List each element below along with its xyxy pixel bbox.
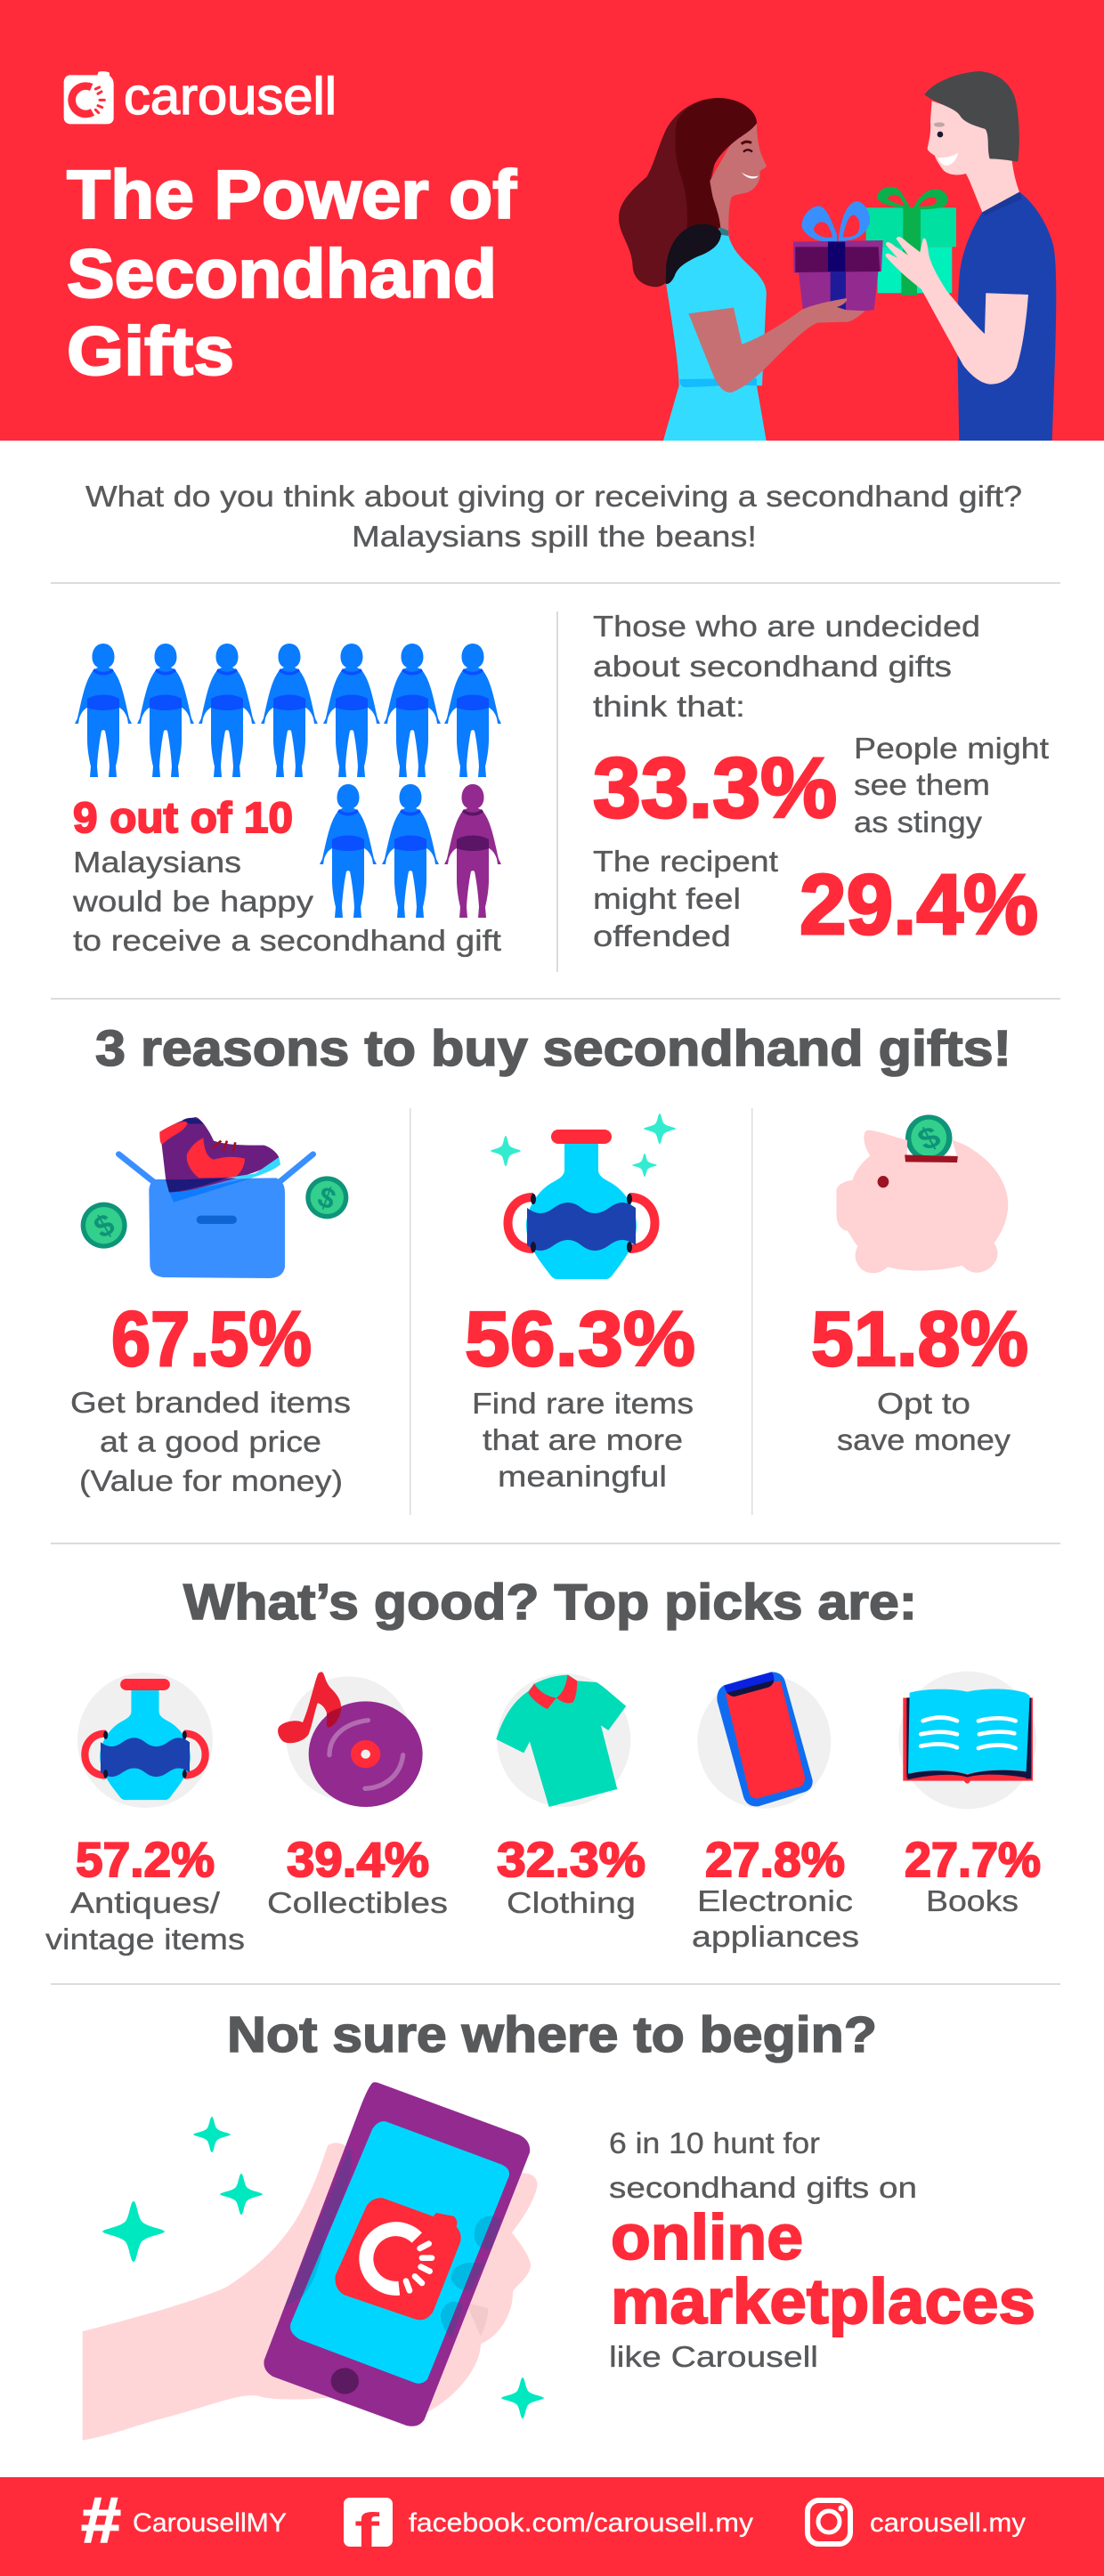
footer — [0, 2477, 1104, 2576]
stat: 33.3%: 33.3% — [593, 741, 837, 836]
text: 6 in 10: 6 in 10 hunt for — [609, 2126, 820, 2159]
label: electronic appliances — [692, 1884, 859, 1953]
icon: vinyl record and music note — [278, 1672, 423, 1807]
text: Malaysians would be happy: Malaysians — [73, 846, 241, 879]
icon: vintage vase — [77, 1673, 213, 1808]
heading: top picks: What’s good? Top picks are: — [183, 1574, 917, 1631]
text: save money: Opt to — [877, 1387, 970, 1420]
text: value for money — [70, 1386, 351, 1497]
phone — [264, 2082, 530, 2426]
label: antiques — [45, 1886, 245, 1956]
sparkles — [102, 2117, 544, 2418]
green gift — [866, 187, 956, 296]
woman — [619, 98, 767, 441]
text: undecided intro: Those who are undecided — [593, 610, 980, 643]
header banner — [0, 0, 1104, 441]
stat: 57.2%: 57.2% — [76, 1832, 215, 1887]
stat: 27.7%: 27.7% — [905, 1832, 1041, 1887]
illustration: woman and man exchanging gifts — [619, 71, 1056, 441]
man — [886, 71, 1056, 441]
icon: box with shoe and coins — [81, 1117, 348, 1278]
label: electronic appliances: appliances — [692, 1920, 859, 1953]
text: Malaysians would be happy: to receive a secondhand gift — [73, 924, 501, 957]
text: people might see them as stingy: see them — [854, 768, 990, 801]
text: people might see them as stingy: as stingy — [854, 806, 983, 838]
intro text: What do you think about giving or receiving a secondhand gift? — [85, 480, 1022, 513]
heading: not sure where to begin: Not sure where to begin? — [227, 2006, 877, 2063]
purple gift — [793, 201, 883, 312]
title — [67, 157, 516, 390]
text: Malaysians would be happy: would be happy — [72, 885, 314, 918]
hand — [83, 2143, 538, 2441]
heading: 3 reasons: 3 reasons to buy secondhand gifts! — [95, 1020, 1011, 1077]
logo: carousell: carousell — [124, 68, 337, 126]
text: the recipient might feel offended: offended — [593, 919, 731, 952]
icon: piggy bank: $ — [912, 1120, 946, 1156]
text: 6 in 10: secondhand gifts on — [609, 2171, 917, 2204]
hashtag — [81, 2485, 287, 2556]
stat: 9 out of 10: 9 out of 10 — [73, 795, 293, 842]
text: rare items: meaningful — [498, 1460, 667, 1493]
facebook: f — [354, 2504, 381, 2557]
label: books: Books — [926, 1884, 1019, 1917]
icon: shirt — [496, 1673, 630, 1807]
label: clothing: Clothing — [507, 1886, 636, 1919]
facebook — [344, 2498, 753, 2557]
callout: online marketplaces: online — [611, 2203, 803, 2273]
text: people might see them as stingy: People might — [854, 732, 1049, 765]
icon: coin left: $ — [88, 1208, 120, 1245]
stat: 51.8%: 51.8% — [811, 1296, 1028, 1382]
icon: vase with sparkles — [491, 1114, 676, 1279]
text: the recipient might feel offended: The recipent — [593, 845, 778, 878]
text: value for money: (Value for money) — [79, 1464, 343, 1497]
text: undecided intro — [593, 610, 980, 723]
text: people might see them as stingy — [854, 732, 1049, 838]
text: 6 in 10 — [609, 2126, 917, 2204]
text: Malaysians would be happy — [72, 846, 501, 957]
icon: smartphone — [697, 1672, 831, 1809]
title: Secondhand — [67, 236, 497, 312]
icon: piggy bank — [836, 1114, 1008, 1273]
text: save money — [837, 1387, 1011, 1456]
text: rare items: that are more — [483, 1423, 683, 1456]
text: the recipient might feel offended: might feel — [593, 882, 741, 915]
stat: 56.3%: 56.3% — [465, 1296, 695, 1382]
instagram: carousell.my — [870, 2508, 1026, 2538]
text: rare items — [472, 1387, 694, 1493]
stat: 27.8%: 27.8% — [705, 1832, 845, 1887]
facebook: facebook.com/carousell.my — [409, 2508, 753, 2538]
text: like Carousell: like Carousell — [609, 2340, 818, 2373]
title: Gifts — [67, 313, 234, 390]
icon: coin left — [81, 1203, 127, 1249]
title: The Power of — [67, 157, 516, 233]
hashtag: CarousellMY — [133, 2508, 287, 2538]
app logo — [335, 2198, 461, 2320]
label: antiques: Antiques/ — [70, 1886, 221, 1919]
label: electronic appliances: Electronic — [697, 1884, 853, 1917]
intro text: Malaysians spill the beans! — [352, 520, 757, 553]
text: rare items: Find rare items — [472, 1387, 694, 1420]
woman's arm — [688, 298, 865, 393]
text: value for money: at a good price — [100, 1425, 321, 1458]
icon: open book — [898, 1672, 1036, 1809]
text: undecided intro: think that: — [593, 690, 745, 723]
icon: coin right: $ — [313, 1179, 340, 1216]
stat: 32.3%: 32.3% — [497, 1832, 645, 1887]
illustration: hand holding phone — [83, 2082, 538, 2441]
hashtag: # — [81, 2485, 121, 2556]
fingers — [285, 2148, 501, 2338]
text: value for money: Get branded items — [70, 1386, 351, 1419]
pictogram: 9 out of 10 people — [75, 644, 501, 918]
instagram — [808, 2500, 1026, 2544]
stat: 39.4%: 39.4% — [287, 1832, 429, 1887]
text: the recipient might feel offended — [593, 845, 778, 952]
text: save money: save money — [837, 1423, 1011, 1456]
stat: 29.4%: 29.4% — [800, 857, 1038, 952]
callout: online marketplaces: marketplaces — [611, 2267, 1035, 2337]
text: undecided intro: about secondhand gifts — [593, 650, 952, 683]
stat: 67.5%: 67.5% — [111, 1296, 312, 1382]
label: collectibles: Collectibles — [267, 1886, 448, 1919]
phone screen — [290, 2121, 509, 2384]
intro text — [85, 480, 1022, 553]
icon: coin right — [305, 1176, 348, 1219]
callout: online marketplaces — [611, 2203, 1035, 2337]
label: antiques: vintage items — [45, 1923, 245, 1956]
